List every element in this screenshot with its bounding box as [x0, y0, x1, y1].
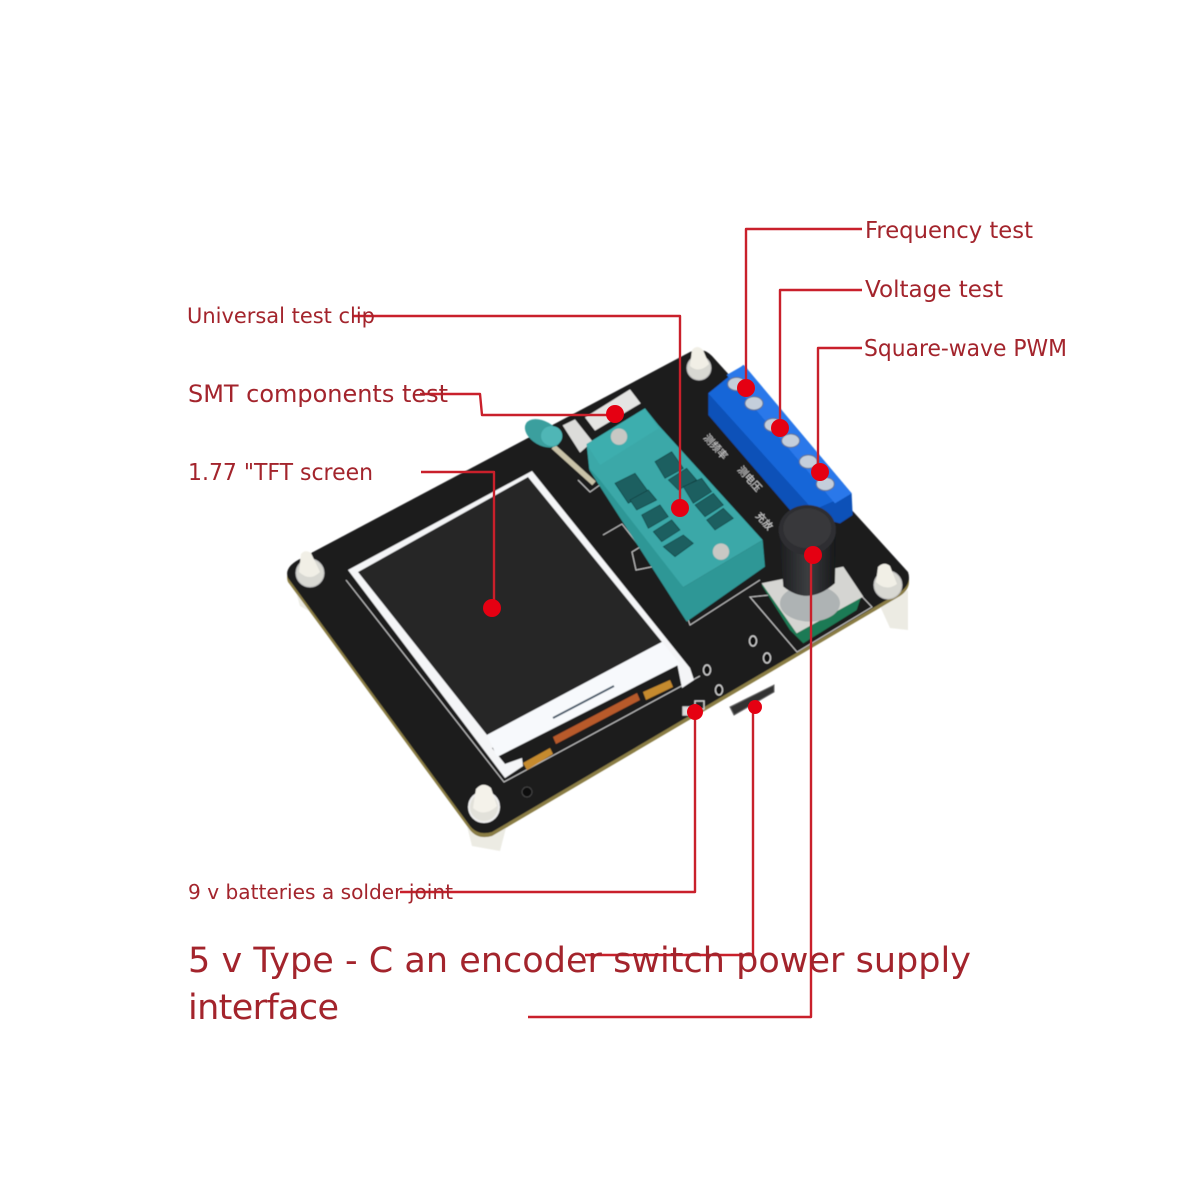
flex cable	[523, 680, 673, 770]
terminal labels on silkscreen: 充放	[753, 509, 776, 533]
terminal labels on silkscreen: 测频率	[701, 431, 731, 462]
terminal block	[708, 365, 853, 523]
label: SMT components test: SMT components test	[188, 380, 448, 408]
ZIF socket	[587, 408, 765, 622]
leader: frequency test	[746, 229, 862, 388]
leader: SMT components test	[420, 394, 615, 415]
screen lower white strip	[487, 642, 680, 757]
PCB	[287, 350, 909, 833]
leader: voltage test	[780, 290, 862, 428]
label: universal test clip: Universal test clip	[187, 304, 375, 328]
label: square-wave PWM: Square-wave PWM	[864, 336, 1067, 362]
label: Type-C and encoder: interface	[188, 988, 339, 1028]
label: voltage test: Voltage test	[865, 277, 1003, 303]
silkscreen outlines	[346, 480, 872, 782]
leader: TFT screen	[421, 472, 494, 608]
terminal labels on silkscreen: 测电压	[735, 463, 765, 494]
PCB edge	[287, 354, 909, 837]
SMT test pads	[563, 389, 641, 453]
label: Type-C and encoder	[188, 941, 971, 1028]
callout lines	[352, 229, 862, 1017]
leader: encoder switch	[528, 555, 811, 1017]
label: TFT screen: 1.77 "TFT screen	[188, 460, 373, 486]
product photo: tester board	[287, 347, 909, 851]
screen bezel	[348, 471, 694, 778]
USB-C port	[730, 685, 774, 715]
label: frequency test: Frequency test	[865, 218, 1033, 244]
screen display	[358, 477, 662, 735]
label: 9 v batteries: 9 v batteries a solder joint	[188, 880, 453, 904]
terminal labels on silkscreen	[701, 431, 776, 533]
callout dots	[483, 379, 829, 720]
label: Type-C and encoder: 5 v Type - C an encoder switch power supply	[188, 941, 971, 981]
leader: Type-C interface	[585, 707, 753, 955]
leader: universal test clip	[352, 316, 680, 508]
mounting hole	[522, 787, 532, 797]
solder pads	[683, 636, 770, 715]
leader: square-wave PWM	[818, 348, 862, 472]
corner posts	[296, 347, 902, 822]
rotary encoder	[762, 505, 863, 643]
ZIF lever	[520, 413, 594, 483]
leader: 9 v batteries	[400, 712, 695, 892]
standoffs below the board	[296, 590, 908, 851]
